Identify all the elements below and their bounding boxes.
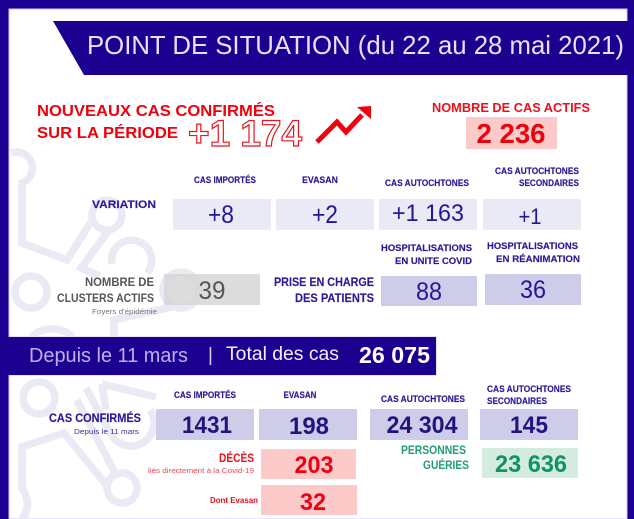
patient care: DES PATIENTS (295, 291, 374, 305)
deaths: liés directement à la Covid-19 (148, 466, 254, 475)
card: cas importés (173, 175, 271, 230)
clusters (57, 274, 260, 316)
card: cas autochtones secondaires: CAS AUTOCHTONES (487, 384, 571, 394)
card: cas autochtones secondaires (480, 384, 578, 440)
card: hospitalisations covid: HOSPITALISATIONS (381, 243, 472, 254)
confirmed label: CAS CONFIRMÉS (49, 412, 141, 425)
card: hospitalisations réanimation (485, 241, 581, 305)
card: cas importés (156, 390, 254, 440)
active cases (432, 100, 590, 149)
card: evasan (259, 390, 357, 440)
card: cas autochtones: CAS AUTOCHTONES (385, 178, 469, 188)
deaths: 32 (300, 489, 326, 516)
separator: | (208, 345, 213, 366)
new confirmed cases heading: SUR LA PÉRIODE (37, 123, 178, 142)
card: hospitalisations réanimation: HOSPITALISATIONS (487, 241, 578, 252)
variation row (92, 166, 581, 230)
card: cas importés: 1431 (182, 412, 232, 439)
recovered (401, 445, 578, 478)
active cases: 2 236 (476, 118, 546, 149)
evasan deaths value (261, 485, 357, 515)
deaths value (261, 449, 356, 479)
recovered: GUÉRIES (423, 459, 469, 472)
card: cas autochtones: CAS AUTOCHTONES (381, 394, 465, 404)
total value: 26 075 (359, 342, 430, 368)
title: POINT DE SITUATION (du 22 au 28 mai 2021) (87, 30, 624, 60)
card: cas autochtones secondaires (483, 166, 581, 230)
card: cas autochtones (370, 394, 468, 440)
total band (0, 337, 436, 375)
card: cas importés: +8 (208, 201, 234, 229)
card: cas autochtones secondaires: SECONDAIRES (519, 178, 579, 188)
new confirmed cases heading (37, 101, 275, 142)
card: hospitalisations covid: EN UNITE COVID (395, 256, 472, 267)
total label: Total des cas (226, 344, 339, 365)
clusters: Foyers d'épidémie (92, 307, 157, 316)
card: hospitalisations réanimation: EN RÉANIMATION (496, 254, 580, 265)
variation label: VARIATION (92, 199, 156, 211)
card: hospitalisations covid: 88 (416, 278, 442, 306)
active cases: NOMBRE DE CAS ACTIFS (432, 100, 590, 115)
patient care label: PRISE EN CHARGE (274, 275, 374, 289)
evasan deaths label: Dont Evasan (210, 496, 258, 505)
background virus pattern (11, 152, 199, 519)
clusters value (164, 274, 260, 305)
card: cas autochtones: 24 304 (386, 412, 458, 439)
clusters label: NOMBRE DE (85, 275, 154, 289)
recovered value (482, 448, 578, 478)
card: evasan (276, 175, 374, 230)
since date: Depuis le 11 mars (29, 345, 188, 367)
card: evasan: EVASAN (302, 175, 338, 185)
deaths label: DÉCÈS (219, 450, 254, 465)
card: cas autochtones secondaires: SECONDAIRES (487, 396, 547, 406)
icon: rising arrow (317, 106, 371, 142)
deaths: 203 (294, 452, 334, 479)
confirmed label (49, 412, 141, 436)
clusters: 39 (198, 277, 226, 305)
card: cas importés: CAS IMPORTÉS (174, 390, 236, 400)
new confirmed cases heading: NOUVEAUX CAS CONFIRMÉS (37, 101, 275, 120)
recovered label: PERSONNES (401, 445, 466, 457)
card: evasan: EVASAN (284, 390, 316, 400)
card: evasan: +2 (312, 201, 338, 229)
card: cas autochtones secondaires: 145 (510, 412, 548, 439)
card: cas importés: CAS IMPORTÉS (194, 175, 256, 185)
title banner (53, 21, 634, 75)
confirmed label: Depuis le 11 mars (74, 427, 139, 436)
card: cas autochtones: +1 163 (392, 200, 464, 227)
new cases figure: +1 174 (188, 113, 302, 154)
card: cas autochtones secondaires: CAS AUTOCHTONES (495, 166, 579, 176)
card: hospitalisations réanimation: 36 (520, 276, 546, 304)
recovered: 23 636 (495, 451, 567, 478)
clusters: CLUSTERS ACTIFS (57, 291, 154, 305)
card: evasan: 198 (289, 413, 329, 440)
card: hospitalisations covid (381, 243, 477, 306)
confirmed cases row (49, 384, 578, 440)
patient care (274, 241, 581, 306)
card: cas autochtones secondaires: +1 (518, 204, 542, 229)
card: cas autochtones (379, 178, 477, 230)
deaths (148, 449, 357, 516)
